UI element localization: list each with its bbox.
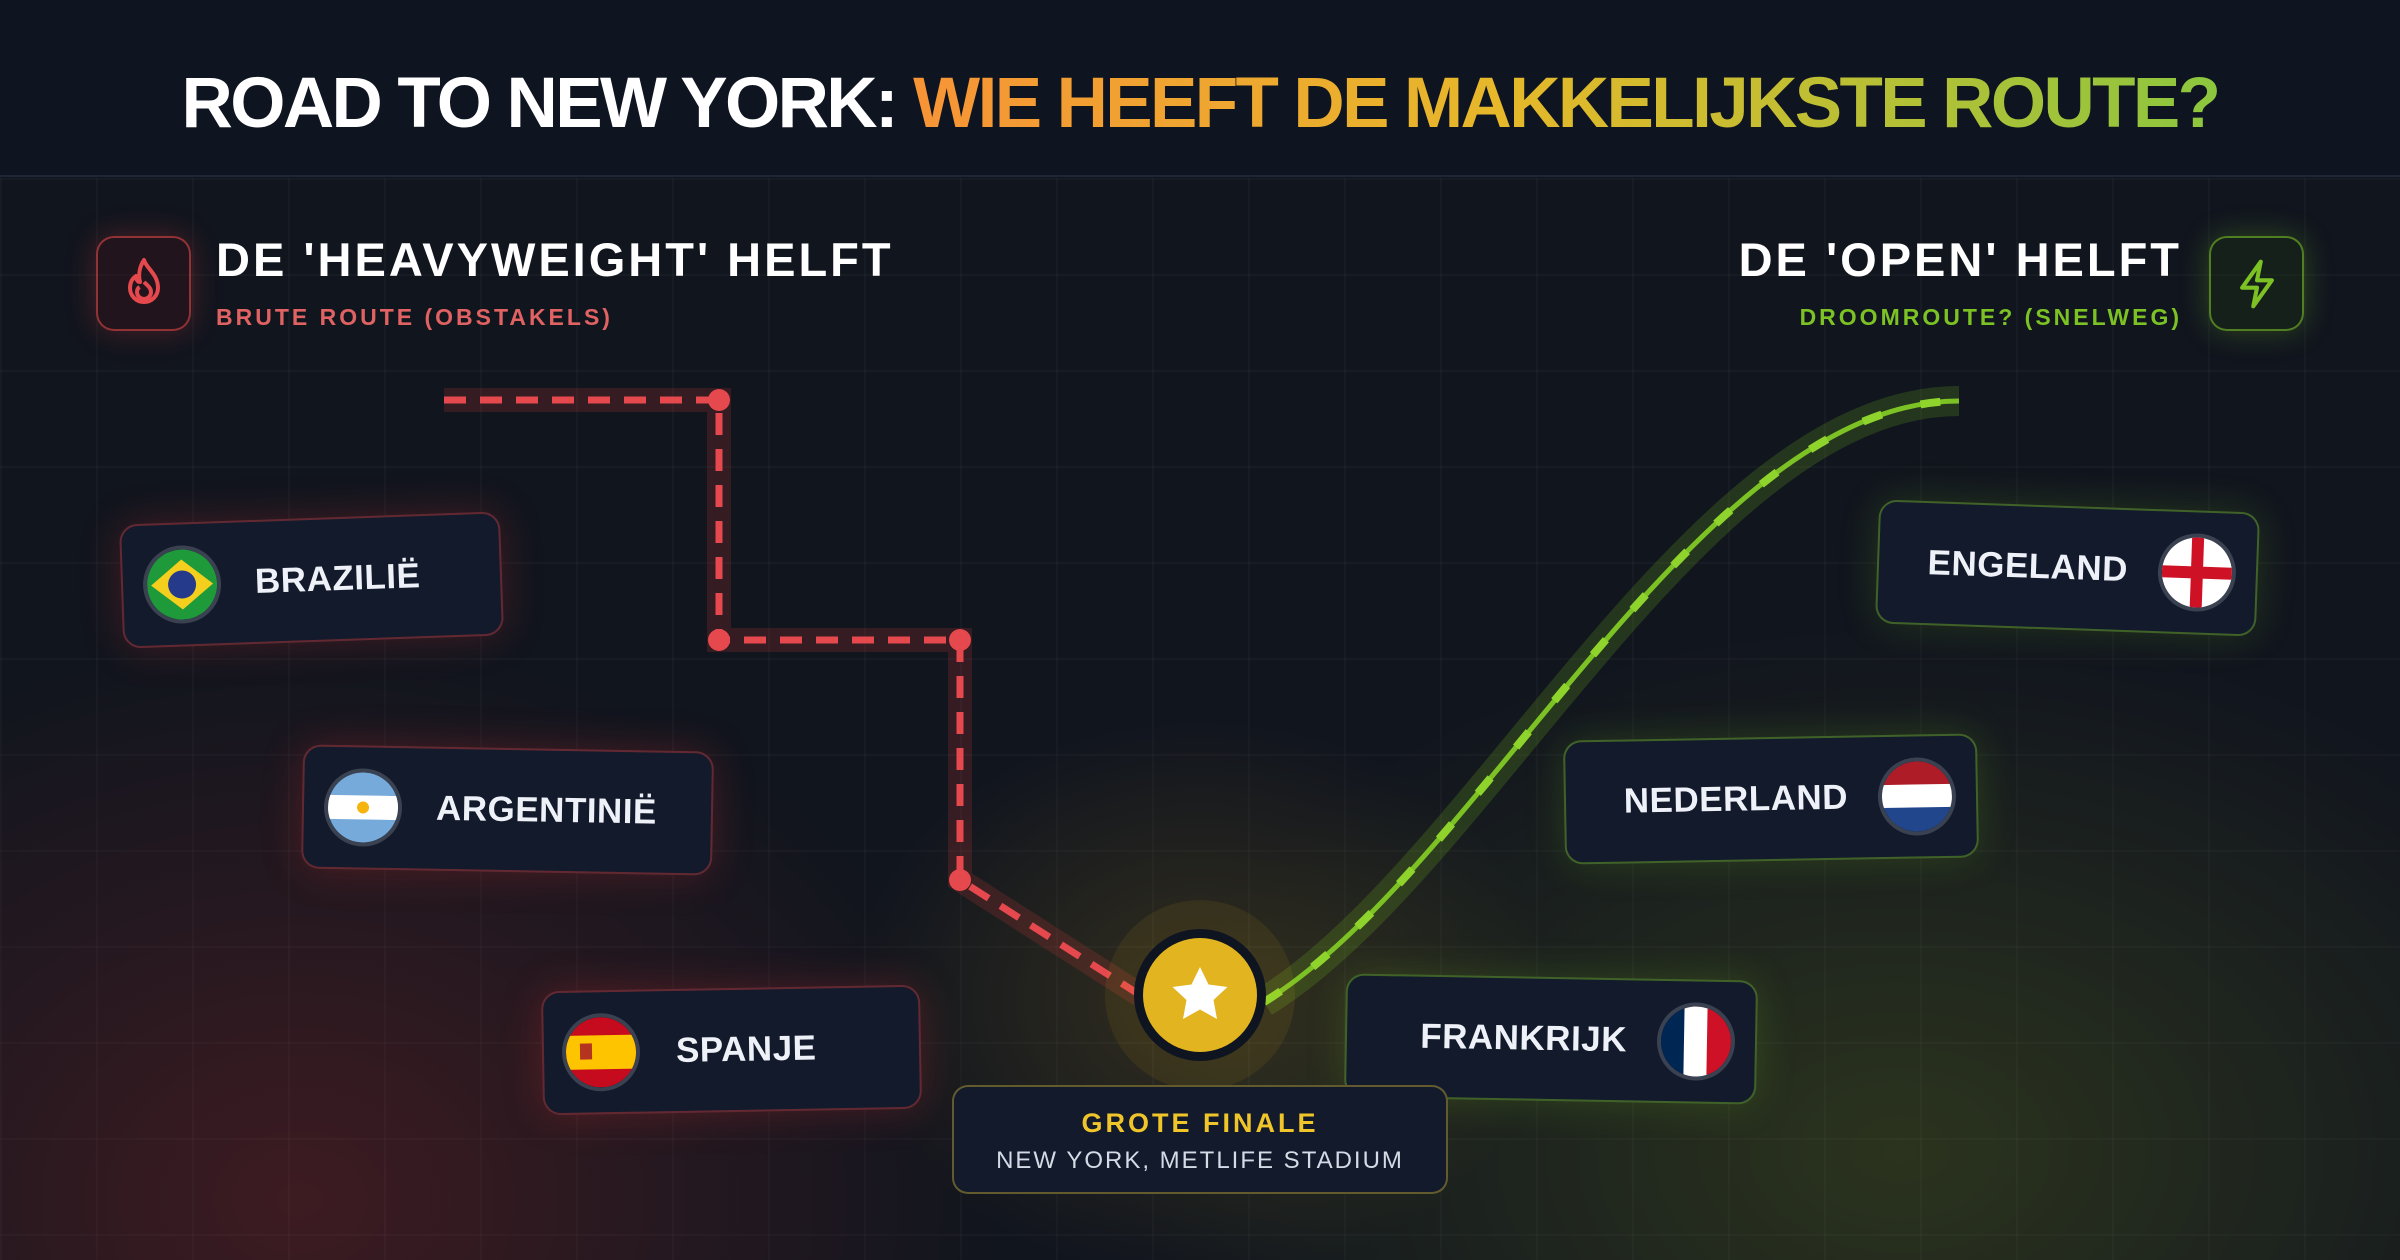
card: Nederland: NEDERLAND [1623,778,1848,821]
flag: Spain [561,1013,641,1092]
card: Brazilië: BRAZILIË [254,556,421,601]
final venue: NEW YORK, METLIFE STADIUM [996,1147,1404,1174]
flag: Netherlands [1877,757,1957,836]
header bar with title [0,0,2400,177]
flag: Brazil [142,544,222,625]
green route curve [1264,401,1959,1002]
flag: France [1656,1002,1736,1081]
final label: GROTE FINALE [1082,1108,1318,1138]
card: Engeland [1875,499,2260,637]
card: Brazilië [119,511,504,649]
card: Engeland: ENGELAND [1927,543,2129,589]
heading: open half: DE 'OPEN' HELFT [1739,233,2182,286]
subheading: dream route: DROOMROUTE? (SNELWEG) [1800,304,2182,330]
subheading: brute route: BRUTE ROUTE (OBSTAKELS) [216,304,613,330]
card: Frankrijk: FRANKRIJK [1420,1017,1627,1059]
heading: heavyweight half: DE 'HEAVYWEIGHT' HELFT [216,233,894,286]
flag: England [2157,532,2237,613]
card: Frankrijk [1344,973,1758,1105]
card: Argentinië: ARGENTINIË [436,789,657,832]
final trophy star [1105,900,1295,1090]
card: Argentinië [301,744,714,876]
red dashed route [444,389,1140,995]
card: Spanje [541,985,922,1115]
icon: lightning [2209,236,2304,331]
callout: grand final [952,1085,1448,1194]
card: Spanje: SPANJE [676,1029,817,1070]
flag: Argentina [323,768,403,847]
title: ROAD TO NEW YORK: WIE HEEFT DE MAKKELIJKSTE ROUTE? [182,64,2218,143]
icon: flame [96,236,191,331]
card: Nederland [1563,733,1979,865]
